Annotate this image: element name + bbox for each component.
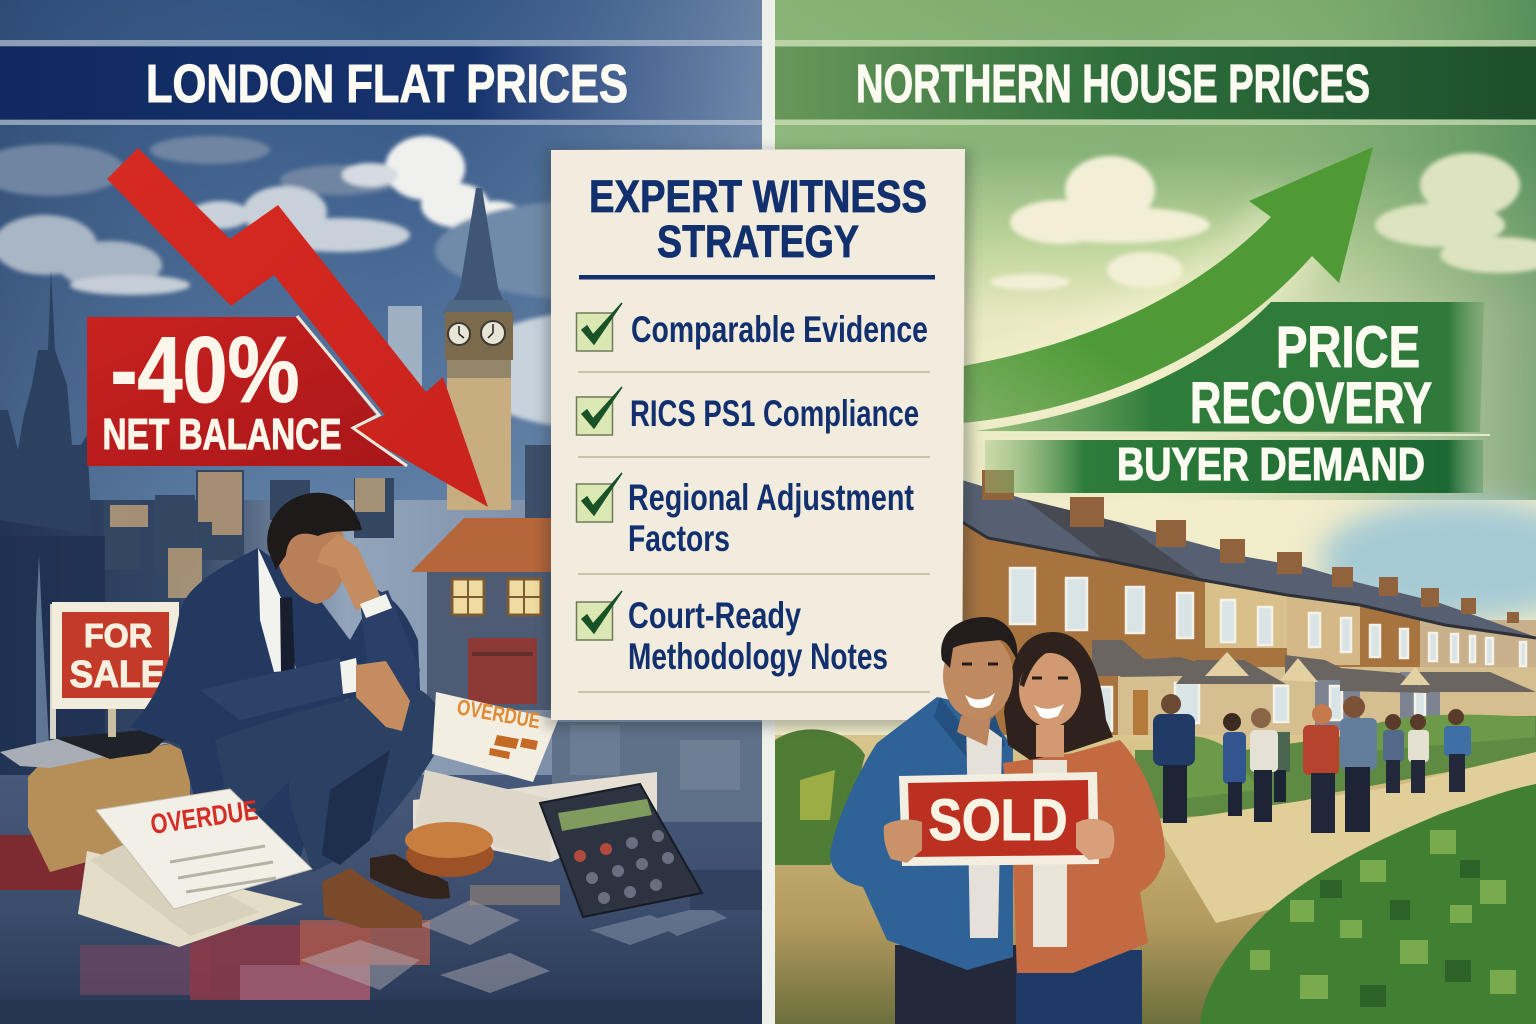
callout: price recovery: PRICE — [1276, 315, 1420, 380]
item: court-ready methodology notes: Methodology Notes — [628, 636, 888, 677]
overdue papers front — [78, 789, 312, 947]
ground — [0, 775, 762, 1024]
city skyline — [0, 270, 560, 780]
banner: Northern house prices — [775, 40, 1536, 125]
overdue paper stack right — [413, 692, 657, 862]
panel: Expert Witness Strategy card: STRATEGY — [657, 216, 859, 267]
for sale sign: FOR — [84, 617, 152, 654]
callout: price recovery: RECOVERY — [1190, 371, 1432, 436]
panel: Expert Witness Strategy card — [545, 149, 971, 728]
panel: London flat prices — [0, 0, 762, 1024]
item: regional adjustment factors — [576, 473, 914, 559]
heading: EXPERT WITNESS — [589, 171, 927, 222]
coin — [405, 822, 494, 877]
foreground hedge — [1200, 784, 1536, 1024]
item: comparable evidence — [576, 303, 928, 351]
for sale sign — [50, 602, 179, 739]
overdue papers front: OVERDUE — [149, 794, 260, 840]
item: regional adjustment factors: Factors — [628, 518, 730, 559]
illustration: stressed man in suit — [130, 493, 450, 928]
item: regional adjustment factors: Regional Adjustment — [628, 477, 914, 518]
banner: London flat prices: LONDON FLAT PRICES — [146, 54, 628, 114]
icon: Big Ben clock tower — [442, 188, 514, 510]
mosaic floor — [0, 722, 762, 1024]
green up arrow glow — [963, 225, 1300, 395]
overdue paper stack right: OVERDUE — [455, 694, 542, 734]
panel: Northern house prices — [775, 0, 1536, 1024]
lawn and ground — [775, 715, 1536, 1024]
item: RICS PS1 compliance — [576, 387, 919, 435]
box and papers behind man — [0, 728, 190, 872]
center divider — [762, 0, 775, 1024]
green up arrow — [963, 147, 1373, 423]
item: RICS PS1 compliance: RICS PS1 Compliance — [630, 393, 919, 434]
callout: price recovery — [975, 302, 1490, 493]
item: court-ready methodology notes: Court-Ready — [628, 595, 801, 636]
terraced houses — [962, 470, 1536, 780]
banner: London flat prices — [0, 40, 762, 125]
storm clouds — [0, 136, 760, 430]
sold sign: SOLD — [928, 788, 1068, 853]
sold sign — [884, 772, 1114, 866]
illustration: happy couple holding sold sign — [830, 617, 1165, 1024]
item: comparable evidence: Comparable Evidence — [631, 309, 928, 350]
callout: -40% net balance: -40% — [110, 317, 300, 422]
icon: calculator — [540, 784, 702, 917]
clouds — [990, 153, 1536, 290]
item: court-ready methodology notes — [576, 591, 888, 677]
callout: -40% net balance — [87, 316, 407, 466]
blue sky patch — [1320, 500, 1536, 620]
red down arrow — [107, 148, 488, 507]
callout: price recovery: BUYER DEMAND — [1117, 438, 1425, 490]
crowd of people — [1153, 694, 1471, 833]
callout: -40% net balance: NET BALANCE — [102, 410, 342, 459]
for sale sign: SALE — [70, 654, 164, 696]
small house — [411, 518, 552, 710]
